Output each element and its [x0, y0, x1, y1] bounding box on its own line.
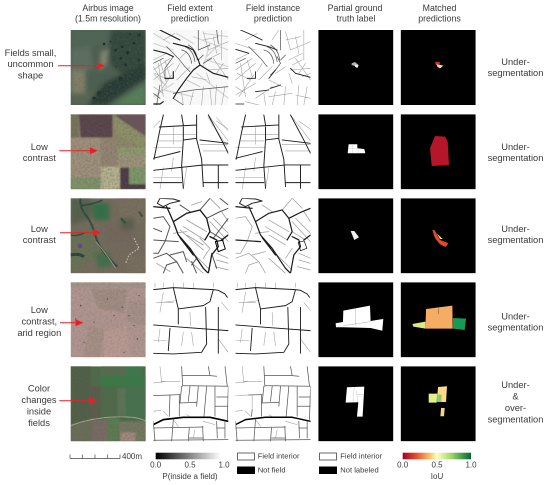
IoU colorbar legend: IoU [431, 472, 443, 481]
red arrows [58, 62, 105, 404]
extent legend: Field interior [258, 452, 300, 461]
heading: Airbus image: Airbus image [82, 3, 134, 13]
label row 5: inside [27, 406, 51, 416]
scale bar [70, 452, 142, 461]
ground truth legend: Field interior [340, 452, 383, 461]
outcome row 5: over- [505, 403, 526, 413]
label row 3: Low [31, 224, 48, 234]
ground truth row 4 [318, 282, 394, 358]
arrow row 1 [58, 62, 105, 69]
ground truth row 5 [318, 366, 394, 442]
extent prediction row 3 [153, 198, 228, 274]
row labels left [5, 48, 61, 428]
heading: Matched predictions: predictions [418, 14, 461, 24]
extent legend: Not field [258, 466, 286, 475]
heading: Matched predictions: Matched [423, 3, 456, 13]
matched predictions row 3 [400, 198, 476, 274]
outcome row 3: Under- [501, 224, 530, 234]
heading: Airbus image: (1.5m resolution) [75, 14, 141, 24]
instance prediction row 4 [236, 282, 310, 354]
extent prediction row 5 [153, 366, 228, 442]
heading: Field instance prediction: Field instance [246, 3, 300, 13]
probability colorbar legend [150, 453, 230, 481]
ground truth row 1 [318, 30, 394, 105]
instance prediction row 2 [236, 114, 310, 190]
extent prediction row 2 [153, 114, 228, 190]
ground truth row 2 [318, 114, 394, 190]
outcome row 1: segmentation [488, 68, 543, 78]
satellite image row 2 [70, 114, 146, 190]
ground truth row 3 [318, 198, 394, 274]
label row 4: Low [31, 305, 48, 315]
column headings [75, 3, 461, 24]
arrow row 5 [59, 397, 97, 404]
instance prediction row 3 [236, 198, 310, 274]
ground truth legend: Not labeled [340, 466, 379, 475]
probability colorbar legend: P(inside a field) [162, 472, 218, 481]
instance prediction row 1 [236, 30, 310, 105]
IoU colorbar legend [397, 453, 477, 481]
outcome row 1: Under- [501, 57, 530, 67]
extent prediction row 1 [153, 30, 228, 105]
IoU colorbar legend: 0.5 [431, 460, 443, 470]
heading: Field instance prediction: prediction [254, 14, 292, 24]
matched predictions row 4 [400, 282, 476, 358]
label row 1: uncommon [8, 59, 54, 69]
extent legend [237, 452, 300, 475]
scale bar: 400m [122, 452, 142, 461]
label row 3: contrast [23, 235, 56, 245]
outcome row 4: segmentation [488, 322, 543, 332]
label row 2: contrast [23, 153, 56, 163]
label row 4: contrast, [21, 316, 57, 326]
IoU colorbar legend: 1.0 [465, 460, 477, 470]
label row 1: Fields small, [5, 48, 56, 58]
outcome row 4: Under- [501, 312, 530, 322]
heading: Field extent prediction: prediction [171, 14, 209, 24]
probability colorbar legend: 0.0 [150, 460, 162, 470]
satellite image row 5 [70, 366, 146, 442]
probability colorbar legend: 1.0 [218, 460, 230, 470]
label row 5: changes [21, 395, 57, 405]
outcome row 2: Under- [501, 142, 530, 152]
outcome row 3: segmentation [488, 235, 543, 245]
outcome row 2: segmentation [488, 153, 543, 163]
outcome row 5: Under- [501, 380, 530, 390]
heading: Partial ground truth label: Partial ground [328, 3, 382, 13]
outcome labels right [488, 57, 543, 424]
ground truth legend [319, 452, 383, 475]
label row 1: shape [18, 70, 43, 80]
outcome row 5: segmentation [488, 414, 543, 424]
matched predictions row 2 [400, 114, 476, 190]
satellite image row 4 [70, 282, 146, 358]
label row 2: Low [31, 142, 48, 152]
matched predictions row 1 [400, 30, 476, 105]
arrow row 4 [60, 319, 83, 326]
outcome row 5: & [512, 392, 519, 402]
heading: Field extent prediction: Field extent [167, 3, 213, 13]
satellite image row 1 [70, 30, 146, 105]
arrow row 2 [59, 147, 98, 154]
IoU colorbar legend: 0.0 [397, 460, 409, 470]
arrow row 3 [60, 229, 101, 236]
heading: Partial ground truth label: truth label [337, 14, 375, 24]
extent prediction row 4 [153, 282, 228, 354]
label row 5: fields [28, 418, 50, 428]
satellite image row 3 [70, 198, 146, 274]
matched predictions row 5 [400, 366, 476, 442]
label row 4: arid region [17, 328, 61, 338]
label row 5: Color [28, 384, 50, 394]
instance prediction row 5 [236, 366, 310, 442]
probability colorbar legend: 0.5 [184, 460, 196, 470]
